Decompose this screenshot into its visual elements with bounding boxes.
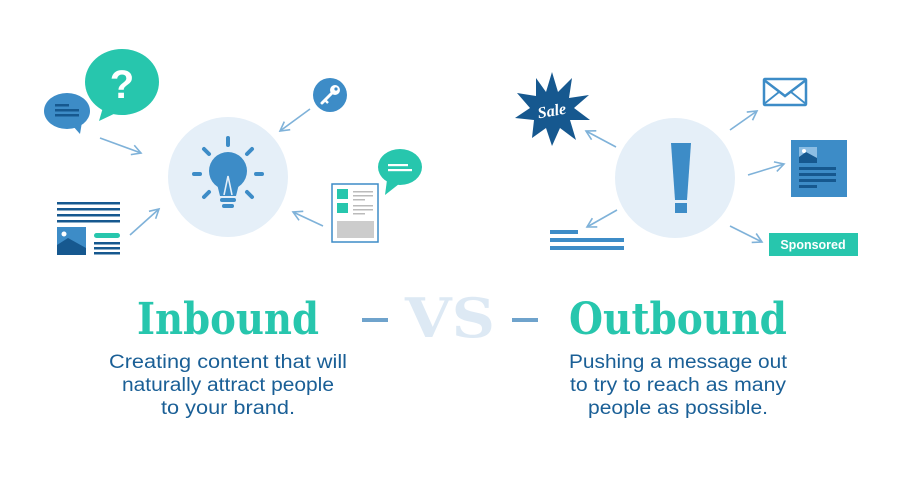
outbound center circle with exclamation [615,118,735,238]
icon: question bubble: ? [110,63,134,107]
icon: key circle [313,78,347,112]
icon: paper with chat bubble [332,149,422,242]
heading: Inbound: Inbound [137,294,319,345]
arrows: inbound [100,109,323,235]
icon: blue article card [791,140,847,197]
icon: sponsored tag: Sponsored [780,238,846,252]
text block: outbound description: to try to reach as many [570,375,787,396]
text block: inbound description: Creating content that will [109,352,347,373]
panel: outbound illustration [515,72,858,256]
icon: sale starburst: Sale [536,101,567,122]
icon: article document [57,202,120,255]
panel: inbound illustration [44,49,422,255]
text block: outbound description: Pushing a message out [569,352,788,373]
icon: text lines [550,230,624,250]
text block: outbound description: people as possible. [588,398,768,419]
heading: Outbound: Outbound [569,294,787,345]
icon: question bubble [85,49,159,121]
icon: sale starburst [515,72,590,146]
text block: inbound description: naturally attract people [122,375,334,396]
heading: VS with dashes: VS [404,286,495,350]
text block: inbound description: to your brand. [161,398,295,419]
heading: VS with dashes [362,286,538,350]
text block: outbound description [569,352,788,419]
icon: small blue speech bubble [44,93,90,134]
inbound center circle with lightbulb [168,117,288,237]
arrows: outbound [586,111,784,242]
text block: inbound description [109,352,347,419]
icon: envelope [764,79,806,105]
icon: sponsored tag [769,233,858,256]
